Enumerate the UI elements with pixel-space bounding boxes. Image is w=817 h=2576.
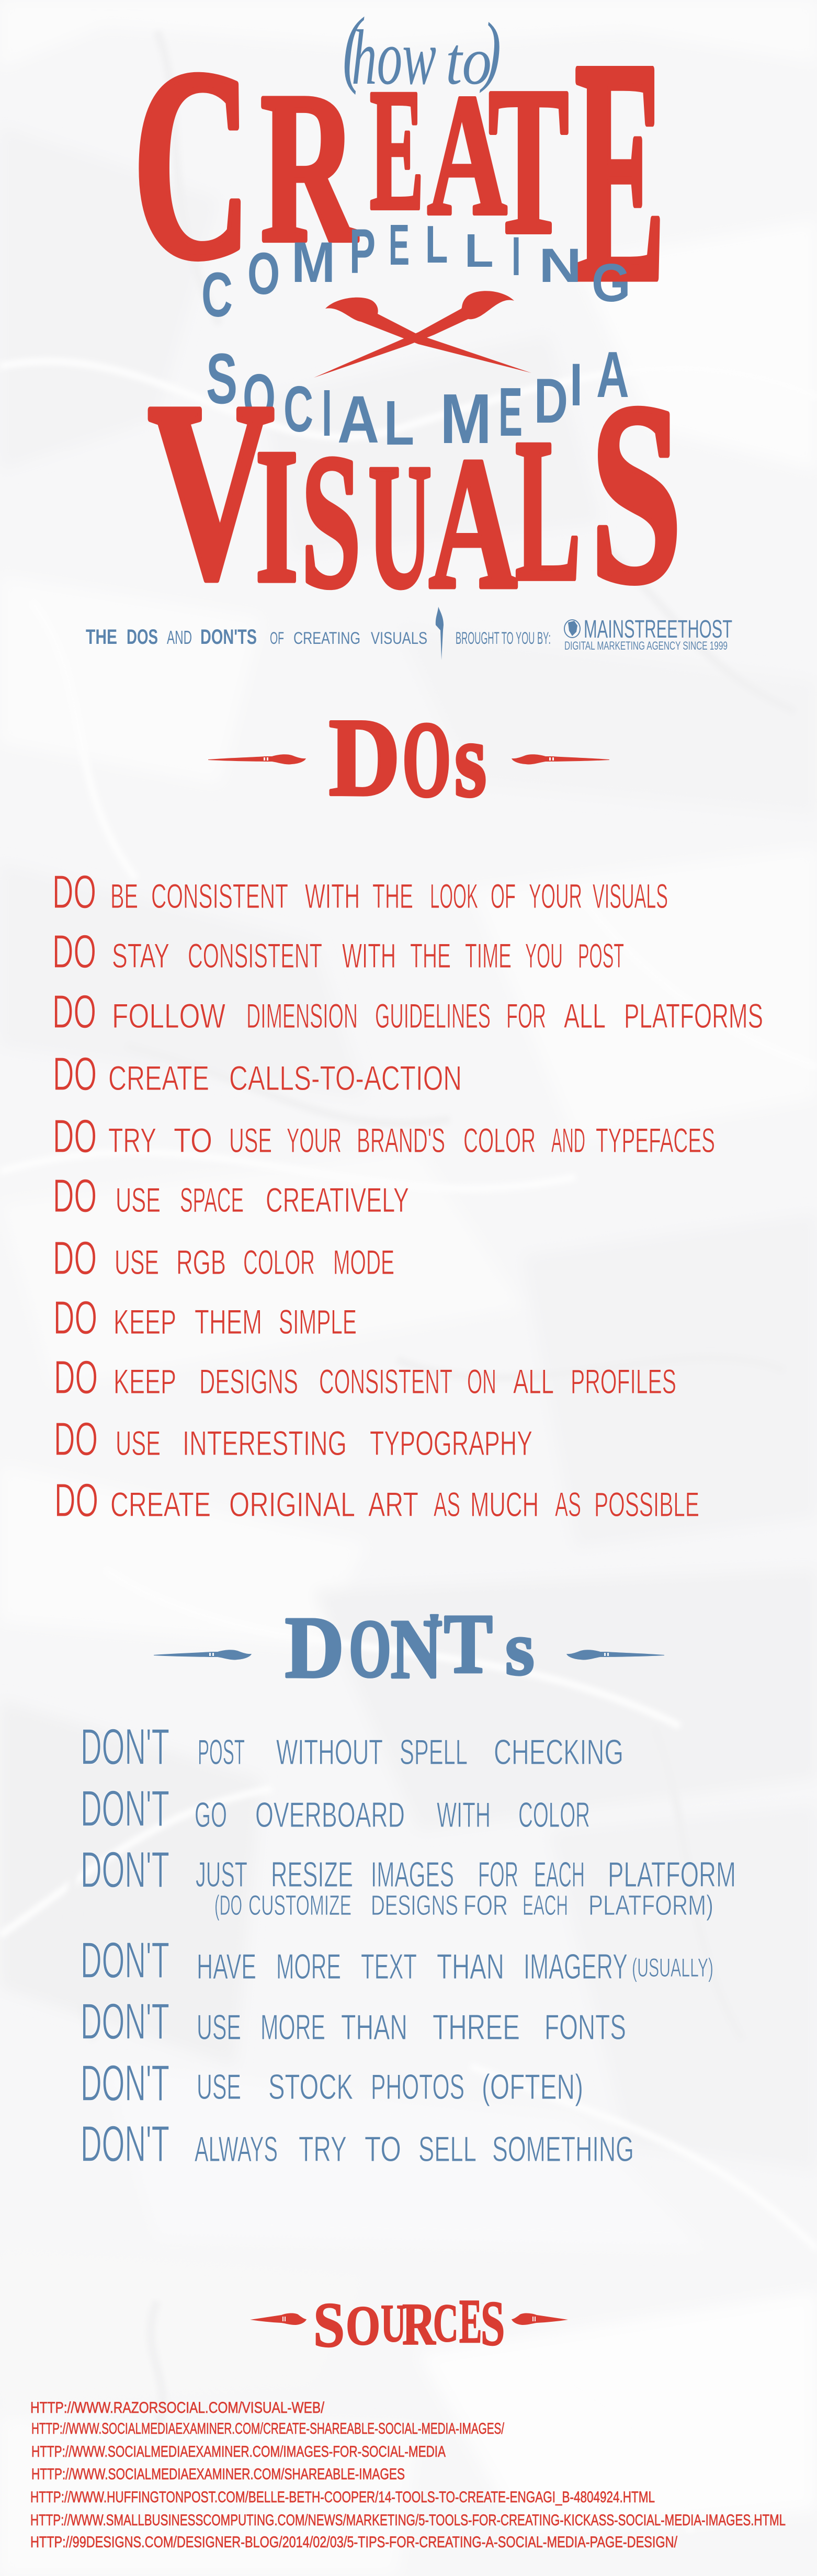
do 9: ALL xyxy=(513,1362,554,1401)
title: SOCIAL MEDIA: C xyxy=(283,373,313,446)
dont 1: DON'T xyxy=(81,1718,169,1775)
title: CREATE: A xyxy=(427,59,507,252)
do 5: TYPEFACES xyxy=(596,1121,715,1160)
subtitle strip: DIGITAL MARKETING AGENCY SINCE 1999 xyxy=(564,639,728,652)
dont 3 xyxy=(81,1841,736,1921)
do 5: TRY xyxy=(108,1121,156,1160)
do 2: CONSISTENT xyxy=(188,936,322,975)
title: CREATE: T xyxy=(489,44,569,277)
dont 6: DON'T xyxy=(81,2055,169,2112)
icon: globe logo xyxy=(564,620,580,638)
dont 5 xyxy=(81,1993,626,2050)
title: COMPELLING: L xyxy=(425,215,448,274)
do 8: KEEP xyxy=(114,1302,176,1341)
dont 4 xyxy=(81,1932,713,1989)
subtitle strip: DOS xyxy=(127,626,158,649)
heading: SOURCES: C xyxy=(433,2293,458,2353)
do 11 xyxy=(54,1474,699,1527)
do 4: CALLS-TO-ACTION xyxy=(229,1059,462,1097)
subtitle strip: DON'TS xyxy=(200,626,257,649)
do 7: USE xyxy=(115,1243,159,1281)
title: SOCIAL MEDIA: L xyxy=(384,388,414,459)
heading: SOURCES: O xyxy=(346,2295,380,2356)
do 8: THEM xyxy=(195,1302,262,1341)
heading: SOURCES xyxy=(313,2286,505,2360)
title: VISUALS: S xyxy=(301,415,361,628)
dont 3: DON'T xyxy=(81,1841,169,1898)
dont 7: SOMETHING xyxy=(492,2129,634,2169)
heading: DON'Ts: N xyxy=(391,1603,442,1696)
dont 3: CUSTOMIZE xyxy=(248,1890,351,1921)
do 8: SIMPLE xyxy=(279,1302,357,1341)
subtitle strip: VISUALS xyxy=(371,629,427,648)
list: dos xyxy=(52,866,763,1527)
dont 3: IMAGES xyxy=(371,1855,454,1894)
title: COMPELLING xyxy=(201,213,631,330)
dont 1: WITHOUT xyxy=(276,1732,383,1772)
icon: right brush SOURCES xyxy=(512,2313,568,2325)
dont 4: HAVE xyxy=(197,1947,256,1987)
do 9: DESIGNS xyxy=(199,1362,298,1401)
do 9: CONSISTENT xyxy=(319,1362,452,1401)
do 9: PROFILES xyxy=(571,1362,676,1401)
dont 3: DESIGNS xyxy=(371,1890,458,1921)
dont 1: POST xyxy=(198,1732,245,1772)
title: SOCIAL MEDIA: A xyxy=(596,338,629,411)
do 2 xyxy=(52,926,624,978)
do 1: YOUR xyxy=(529,877,582,915)
dont 3: FOR xyxy=(463,1890,508,1921)
icon: right brush DOs xyxy=(512,754,609,764)
dont 7 xyxy=(81,2115,634,2172)
dont 3: JUST xyxy=(196,1855,247,1894)
title: SOCIAL MEDIA: E xyxy=(498,374,523,451)
icon: crossed paint brushes xyxy=(314,291,531,378)
dont 7: ALWAYS xyxy=(195,2129,278,2169)
icon: left brush DON'Ts xyxy=(154,1650,252,1660)
do 3: FOLLOW xyxy=(112,996,226,1035)
heading: DON'Ts: O xyxy=(349,1603,391,1694)
dont 5: USE xyxy=(197,2007,241,2047)
dont 6: USE xyxy=(197,2067,241,2107)
list: source urls: HTTP://WWW.RAZORSOCIAL.COM/VISUAL-WEB/ xyxy=(30,2399,325,2416)
do 9: DO xyxy=(54,1352,98,1404)
do 10: DO xyxy=(54,1413,98,1466)
do 1: LOOK xyxy=(430,877,478,915)
do 5: AND xyxy=(551,1121,585,1160)
dont 3: EACH xyxy=(523,1890,568,1921)
title: SOCIAL MEDIA: D xyxy=(534,365,568,436)
dont 3: PLATFORM) xyxy=(588,1890,713,1921)
dont 2 xyxy=(81,1780,590,1837)
title: CREATE: C xyxy=(133,14,251,314)
heading: SOURCES: U xyxy=(381,2294,406,2353)
title: SOCIAL MEDIA: I xyxy=(322,376,332,450)
do 11: CREATE xyxy=(110,1485,211,1524)
do 11: POSSIBLE xyxy=(594,1485,699,1524)
heading: SOURCES: E xyxy=(459,2286,482,2356)
dont 3: PLATFORM xyxy=(608,1855,736,1894)
do 6: DO xyxy=(53,1170,97,1222)
dont 7: TRY xyxy=(299,2129,347,2169)
do 5: YOUR xyxy=(287,1121,342,1160)
dont 3: RESIZE xyxy=(271,1855,353,1894)
do 1: WITH xyxy=(305,877,360,915)
title: VISUALS: L xyxy=(515,397,581,623)
title: how to: ) xyxy=(479,7,501,94)
do 11: ORIGINAL xyxy=(229,1485,355,1524)
title: COMPELLING: G xyxy=(592,253,631,313)
title: CREATE xyxy=(133,0,665,346)
title: COMPELLING: P xyxy=(349,217,376,287)
title: COMPELLING: O xyxy=(247,240,280,307)
dont 7: SELL xyxy=(418,2129,476,2169)
title: SOCIAL MEDIA xyxy=(206,338,629,459)
dont 1: CHECKING xyxy=(494,1732,623,1772)
do 9 xyxy=(54,1352,676,1404)
subtitle strip: OF xyxy=(270,629,284,648)
heading: DON'Ts xyxy=(285,1597,535,1696)
do 2: DO xyxy=(52,926,96,978)
dont 4: DON'T xyxy=(81,1932,169,1989)
dont 5: FONTS xyxy=(544,2007,626,2047)
do 11: AS xyxy=(555,1485,581,1524)
do 5 xyxy=(53,1110,715,1163)
subtitle strip: MAINSTREETHOST xyxy=(584,616,732,643)
title: CREATE: R xyxy=(260,48,358,287)
list: source urls: HTTP://WWW.SOCIALMEDIAEXAMINER.COM/IMAGES-FOR-SOCIAL-MEDIA xyxy=(31,2443,446,2460)
list: dos: POST xyxy=(578,936,624,975)
do 6: SPACE xyxy=(180,1181,244,1219)
do 1: CONSISTENT xyxy=(151,877,288,915)
title: how to: to xyxy=(446,24,492,99)
title: COMPELLING: C xyxy=(201,259,233,330)
title: VISUALS xyxy=(148,350,682,636)
title: COMPELLING: I xyxy=(512,226,521,287)
dont 3: FOR xyxy=(478,1855,518,1894)
do 6 xyxy=(53,1170,409,1222)
dont 1 xyxy=(81,1718,623,1775)
do 1: VISUALS xyxy=(593,877,668,915)
do 2: TIME xyxy=(465,936,512,975)
title: VISUALS: V xyxy=(148,350,274,631)
heading: DOs xyxy=(329,696,486,819)
dont 4: (USUALLY) xyxy=(632,1953,713,1982)
title: COMPELLING: E xyxy=(389,213,410,277)
do 3: GUIDELINES xyxy=(375,996,491,1035)
dont 7: DON'T xyxy=(81,2115,169,2172)
subtitle strip xyxy=(86,607,732,660)
dont 4: IMAGERY xyxy=(524,1947,628,1987)
subtitle strip: BROUGHT TO YOU BY: xyxy=(456,629,551,648)
do 4: DO xyxy=(53,1048,97,1100)
do 9: ON xyxy=(467,1362,496,1401)
do 3: DIMENSION xyxy=(246,996,358,1035)
title: VISUALS: S xyxy=(591,350,682,636)
dont 7: TO xyxy=(365,2129,401,2169)
heading: DOs: s xyxy=(455,700,486,819)
subtitle strip: CREATING xyxy=(293,629,360,648)
dont 6: STOCK xyxy=(268,2067,353,2107)
heading: DON'Ts: s xyxy=(505,1606,535,1691)
list: source urls xyxy=(30,2399,786,2551)
do 11: AS xyxy=(434,1485,460,1524)
do 2: YOU xyxy=(525,936,563,975)
dont 2: COLOR xyxy=(518,1795,590,1835)
list: source urls: HTTP://WWW.SOCIALMEDIAEXAMINER.COM/CREATE-SHAREABLE-SOCIAL-MEDIA-IMAGES/ xyxy=(31,2420,504,2437)
do 3: FOR xyxy=(506,996,546,1035)
dont 4: TEXT xyxy=(361,1947,417,1987)
title: VISUALS: A xyxy=(429,418,517,628)
do 7: COLOR xyxy=(243,1243,315,1281)
do 6: USE xyxy=(116,1181,161,1219)
do 11: DO xyxy=(54,1474,98,1527)
heading: DON'Ts: ' xyxy=(426,1602,442,1665)
title: VISUALS: I xyxy=(255,410,299,623)
list: don'ts xyxy=(81,1718,736,2172)
do 5: DO xyxy=(53,1110,97,1163)
dont 2: DON'T xyxy=(81,1780,169,1837)
title: how to: how xyxy=(351,14,436,101)
title: how to: ( xyxy=(343,0,365,95)
do 3 xyxy=(52,986,763,1038)
dont 2: WITH xyxy=(437,1795,491,1835)
dont 5: MORE xyxy=(260,2007,325,2047)
title: SOCIAL MEDIA: S xyxy=(206,338,237,419)
dont 3: EACH xyxy=(534,1855,585,1894)
do 5: BRAND'S xyxy=(357,1121,445,1160)
title: SOCIAL MEDIA: O xyxy=(243,361,276,434)
title: VISUALS: U xyxy=(368,428,432,626)
do 8: DO xyxy=(53,1292,97,1344)
icon: right brush DON'Ts xyxy=(566,1650,664,1660)
do 1: THE xyxy=(372,877,413,915)
do 7: DO xyxy=(53,1232,97,1285)
do 11: MUCH xyxy=(470,1485,539,1524)
title: COMPELLING: N xyxy=(539,239,582,292)
do 3: ALL xyxy=(564,996,606,1035)
do 4: CREATE xyxy=(108,1059,209,1097)
dont 6 xyxy=(81,2055,583,2112)
do 3: DO xyxy=(52,986,96,1038)
heading: DON'Ts: T xyxy=(444,1597,493,1690)
heading: DOs: D xyxy=(329,696,400,819)
dont 1: SPELL xyxy=(400,1732,468,1772)
subtitle strip: THE xyxy=(86,626,117,649)
dont 6: (OFTEN) xyxy=(482,2067,583,2107)
do 1 xyxy=(52,866,668,918)
dont 2: GO xyxy=(195,1795,227,1835)
subtitle strip: AND xyxy=(167,627,192,648)
do 6: CREATIVELY xyxy=(266,1181,409,1219)
heading: DOs: O xyxy=(402,700,451,819)
title: SOCIAL MEDIA: M xyxy=(440,379,492,458)
icon: vertical paint brush xyxy=(436,607,444,660)
icon: left brush DOs xyxy=(208,754,306,764)
do 8 xyxy=(53,1292,357,1344)
do 2: WITH xyxy=(342,936,396,975)
do 10 xyxy=(54,1413,532,1466)
title: COMPELLING: M xyxy=(291,230,335,294)
do 2: STAY xyxy=(112,936,169,975)
dont 3: (DO xyxy=(214,1890,242,1921)
do 9: KEEP xyxy=(114,1362,176,1401)
do 7: RGB xyxy=(176,1243,226,1281)
heading: DON'Ts: D xyxy=(285,1599,344,1696)
do 1: BE xyxy=(110,877,138,915)
heading: SOURCES: S xyxy=(481,2288,505,2359)
dont 5: THREE xyxy=(433,2007,520,2047)
dont 4: THAN xyxy=(437,1947,504,1987)
title: CREATE: E xyxy=(370,54,424,246)
do 10: TYPOGRAPHY xyxy=(370,1424,532,1462)
do 11: ART xyxy=(368,1485,418,1524)
do 5: TO xyxy=(174,1121,212,1160)
do 10: INTERESTING xyxy=(183,1424,347,1462)
do 4 xyxy=(53,1048,462,1100)
dont 2: OVERBOARD xyxy=(255,1795,405,1835)
do 5: COLOR xyxy=(463,1121,536,1160)
do 2: THE xyxy=(410,936,451,975)
heading: SOURCES: R xyxy=(402,2291,436,2358)
do 1: OF xyxy=(491,877,516,915)
do 7 xyxy=(53,1232,394,1285)
title: SOCIAL MEDIA: A xyxy=(337,383,379,457)
do 1: DO xyxy=(52,866,96,918)
dont 6: PHOTOS xyxy=(371,2067,464,2107)
heading: SOURCES: S xyxy=(313,2289,345,2360)
dont 4: MORE xyxy=(276,1947,341,1987)
title: CREATE: E xyxy=(575,0,665,346)
icon: left brush SOURCES xyxy=(250,2313,307,2325)
title: SOCIAL MEDIA: I xyxy=(570,351,583,418)
dont 5: THAN xyxy=(341,2007,407,2047)
do 10: USE xyxy=(116,1424,161,1462)
list: source urls: HTTP://WWW.SOCIALMEDIAEXAMINER.COM/SHAREABLE-IMAGES xyxy=(31,2466,405,2483)
dont 5: DON'T xyxy=(81,1993,169,2050)
title: COMPELLING: L xyxy=(464,224,494,277)
do 7: MODE xyxy=(333,1243,394,1281)
do 5: USE xyxy=(229,1121,272,1160)
